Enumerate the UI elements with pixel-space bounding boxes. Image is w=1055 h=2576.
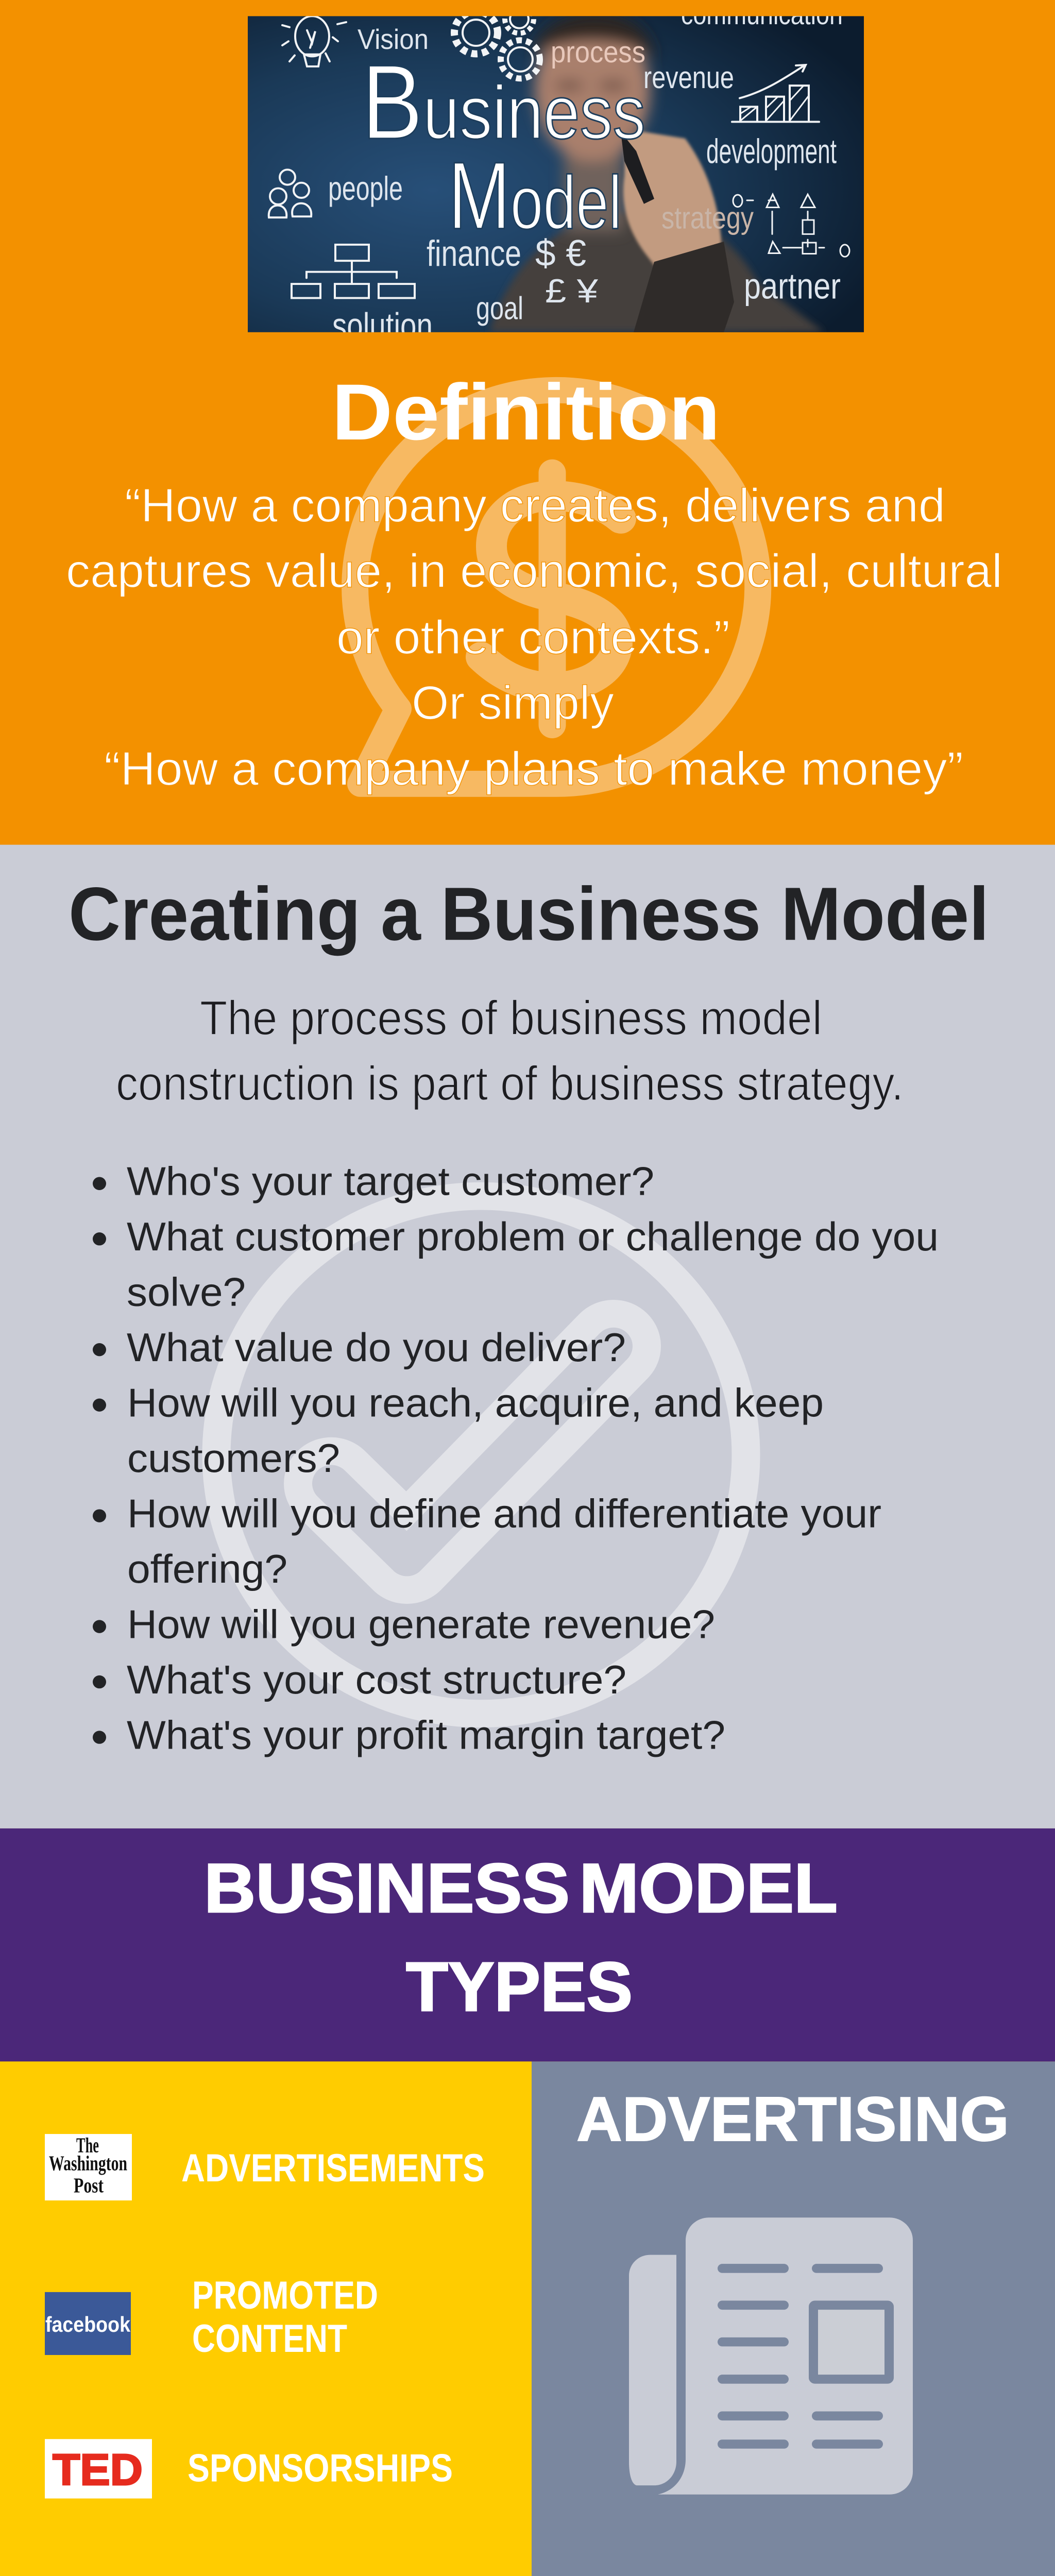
person: hand and pen (623, 132, 721, 292)
panel: creating a business model (0, 845, 1055, 1828)
heading: business model types: TYPES (406, 1947, 633, 2025)
logo: the washington post: Post (74, 2174, 104, 2197)
label: promoted content: CONTENT (192, 2317, 347, 2361)
logo: ted: TED (53, 2446, 143, 2495)
text: intro: construction is part of business strategy. (116, 1057, 904, 1111)
chalk text: strategy (661, 200, 754, 235)
chalk text: solution (332, 306, 433, 346)
heading: advertising: ADVERTISING (576, 2084, 1009, 2154)
heading: creating a business model: Creating a Business Model (69, 872, 989, 956)
icon: growth chart (732, 65, 819, 122)
list: business model questions: What customer problem or challenge do you (127, 1214, 939, 1259)
panel: definition (0, 0, 1055, 845)
label: promoted content (192, 2274, 378, 2361)
photo: business model chalkboard (248, 0, 864, 346)
list: business model questions: What's your cost structure? (127, 1657, 626, 1702)
icon: dollar speech bubble watermark (355, 390, 758, 784)
chalk text: process (551, 35, 645, 69)
label: promoted content: PROMOTED (192, 2274, 378, 2317)
list: business model questions: Who's your target customer? (127, 1159, 654, 1204)
logo: facebook (45, 2292, 131, 2355)
list: business model questions: customers? (127, 1435, 340, 1481)
list: business model questions (93, 1159, 939, 1757)
icon: light bulb (282, 16, 346, 66)
chalk text: finance (427, 234, 521, 274)
icon: flow diagram (733, 194, 849, 257)
chalk text: people (328, 170, 403, 207)
chalk text: Business (362, 43, 645, 161)
panel: advertising examples (0, 2061, 532, 2576)
chalk text: £ ¥ (545, 273, 599, 310)
chalk text: partner (744, 266, 841, 307)
icon: gears (454, 5, 540, 78)
logo: the washington post: The (76, 2133, 99, 2157)
logo: ted (45, 2439, 152, 2499)
chalk text (328, 0, 843, 346)
chalk text: Vision (358, 23, 429, 55)
heading: business model types: BUSINESS MODEL (204, 1849, 838, 1927)
text: definition quote: “How a company plans to make money” (104, 742, 963, 795)
text: definition quote: Or simply (412, 676, 615, 729)
icon: org chart (292, 245, 415, 298)
icon: people (269, 170, 311, 217)
chalk text: $ € (535, 232, 586, 274)
list: business model questions: solve? (127, 1269, 246, 1314)
logo: facebook: facebook (45, 2313, 130, 2337)
text: definition quote: “How a company creates, delivers and (125, 479, 945, 532)
person: suit (489, 201, 824, 332)
icon: check mark circle watermark (216, 1196, 746, 1714)
list: business model questions: How will you reach, acquire, and keep (127, 1380, 824, 1425)
list: business model questions: What's your profit margin target? (127, 1712, 725, 1757)
text: definition quote: captures value, in economic, social, cultural (66, 544, 1002, 597)
chalk icons (269, 5, 849, 298)
label: advertisements: ADVERTISEMENTS (181, 2146, 485, 2190)
person: sleeve (634, 242, 734, 332)
heading: business model types (204, 1849, 838, 2025)
list: business model questions: How will you generate revenue? (127, 1601, 715, 1647)
chalk text: goal (476, 291, 523, 326)
chalk text: revenue (643, 60, 734, 95)
logo: the washington post: Washington (49, 2151, 127, 2175)
panel: advertising (532, 2061, 1055, 2576)
person: head (533, 12, 654, 231)
heading: definition: Definition (332, 368, 720, 457)
chalk text: Model (448, 142, 622, 249)
icon: newspaper (629, 2217, 913, 2495)
text: definition quote (66, 479, 1002, 795)
label: sponsorships: SPONSORSHIPS (188, 2446, 453, 2490)
list: business model questions: offering? (127, 1546, 287, 1591)
panel: business model types banner (0, 1828, 1055, 2061)
text: intro: The process of business model (200, 991, 822, 1045)
logo: the washington post (45, 2133, 132, 2200)
text: intro (116, 991, 904, 1111)
list: business model questions: How will you define and differentiate your (127, 1490, 881, 1536)
text: definition quote: or other contexts.” (336, 611, 730, 664)
list: business model questions: What value do you deliver? (127, 1325, 626, 1370)
